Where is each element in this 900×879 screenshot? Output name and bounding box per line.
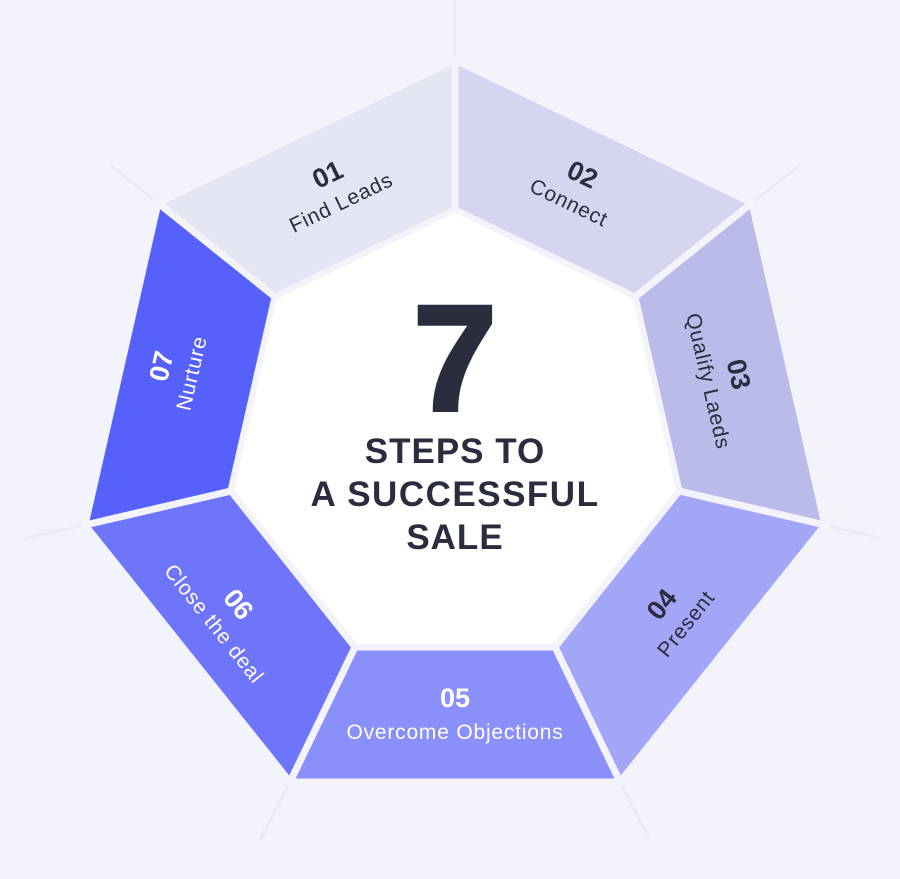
segment 01: 01: [308, 155, 348, 195]
segment 01: Find Leads: [286, 168, 397, 238]
segment 02: [455, 60, 752, 297]
segment 01: [158, 60, 455, 297]
segment 03: Qualify Laeds: [681, 311, 735, 451]
segment 07: Nurture: [172, 334, 212, 413]
segment 02: 02: [562, 155, 602, 195]
segment 06: Close the deal: [159, 560, 268, 688]
title: SALE: [406, 518, 504, 557]
title: [311, 274, 599, 557]
segment 05: [290, 647, 620, 782]
segment 04: 04: [641, 583, 683, 625]
segment 05: 05: [440, 683, 470, 713]
segment 03: 03: [721, 356, 757, 392]
segment 04: Present: [653, 586, 720, 662]
title: A SUCCESSFUL: [311, 475, 599, 514]
title: STEPS TO: [365, 432, 545, 471]
segment 03: [635, 203, 825, 525]
segment 06: 06: [217, 583, 259, 625]
center white heptagon: [234, 213, 676, 644]
segment 04: [555, 491, 825, 782]
segment 05: Overcome Objections: [346, 721, 564, 744]
title: 7: [413, 274, 497, 442]
segment 07: 07: [143, 348, 179, 384]
segment 06: [85, 491, 355, 782]
segment 02: Connect: [526, 175, 611, 232]
segment 07: [85, 203, 275, 525]
